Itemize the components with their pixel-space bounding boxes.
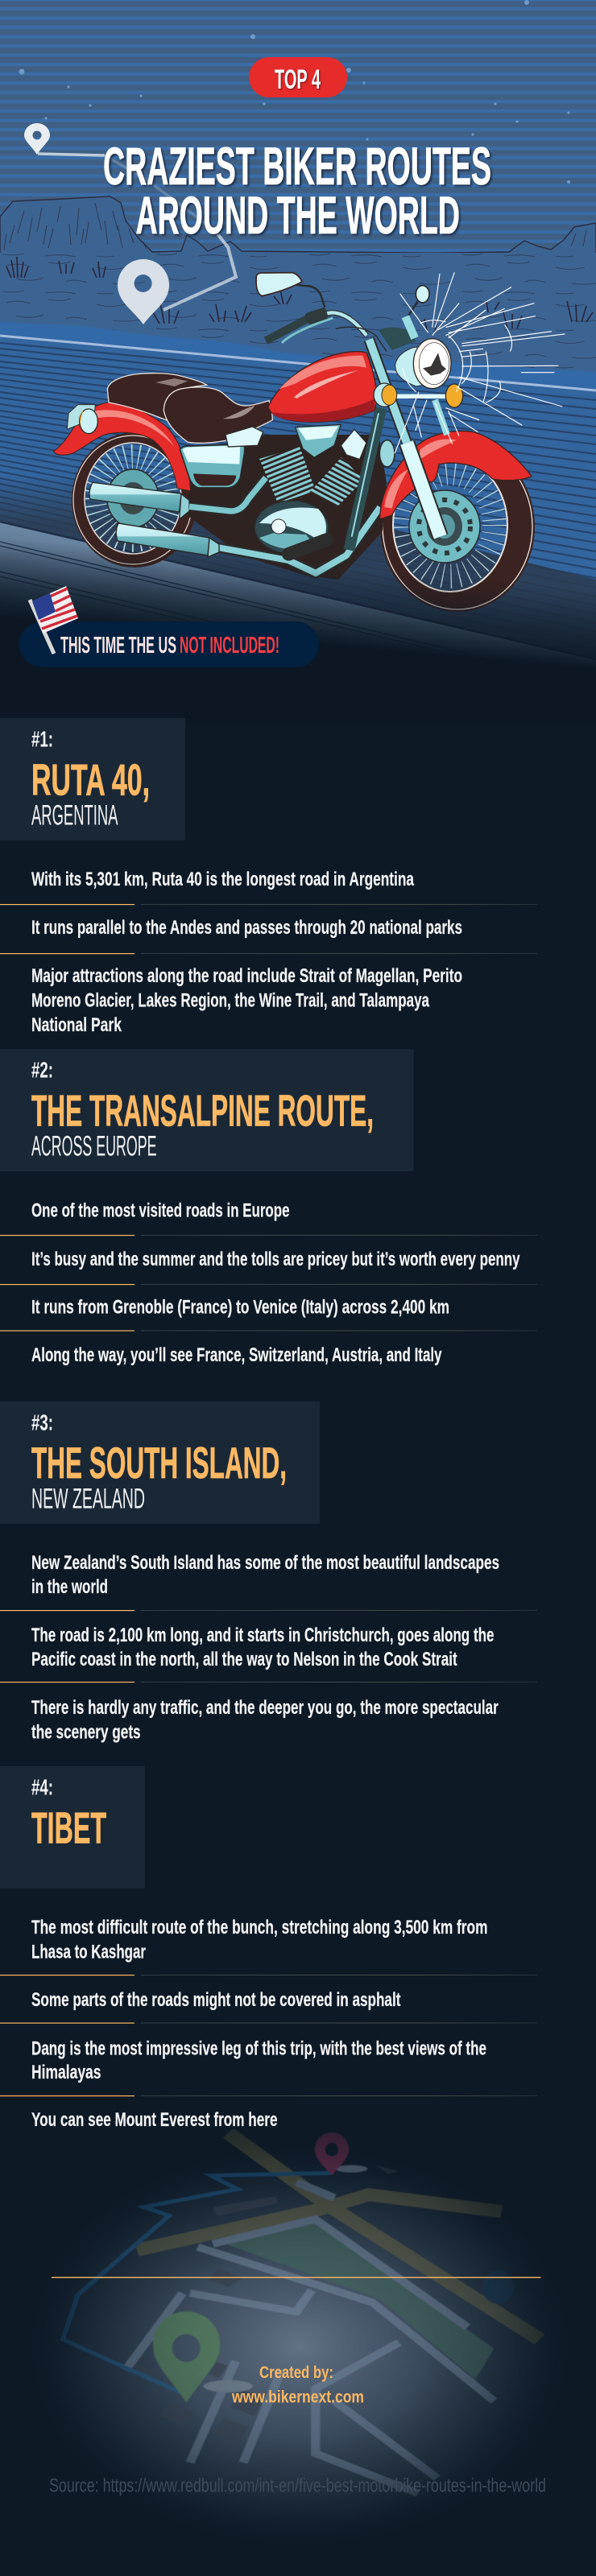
tank highlight bbox=[279, 356, 366, 389]
text: Tibet facts: Some parts of the roads might not be covered in asphalt bbox=[31, 1989, 400, 2011]
panel: Ruta 40 heading: RUTA 40, bbox=[31, 754, 150, 804]
taillight bbox=[67, 405, 97, 434]
fork upper left bbox=[369, 340, 407, 443]
pillion seat bbox=[107, 374, 207, 421]
footer divider line bbox=[52, 2277, 541, 2278]
brake lever bbox=[282, 318, 333, 343]
icon: faint blue pin bbox=[482, 2270, 514, 2304]
fork right bbox=[435, 400, 447, 435]
front wheel bbox=[380, 441, 535, 612]
crank cover bbox=[255, 501, 329, 554]
tank lower shade bbox=[271, 398, 375, 422]
oil tank cover bbox=[180, 444, 245, 488]
panel: South Island heading: NEW ZEALAND bbox=[31, 1484, 145, 1515]
right bar stub bbox=[405, 316, 415, 338]
upper exhaust pipe bbox=[189, 477, 266, 511]
top 4 badge bbox=[249, 57, 347, 97]
rider seat bbox=[163, 387, 272, 443]
text: South Island facts bbox=[0, 1552, 537, 1744]
text: Ruta 40 facts: With its 5,301 km, Ruta 40 is the longest road in Argentina bbox=[31, 869, 414, 890]
blue route bbox=[63, 2173, 331, 2393]
indicator bar bbox=[392, 390, 451, 402]
section 1: Ruta 40 bbox=[0, 718, 537, 1036]
panel: Tibet heading: TIBET bbox=[31, 1802, 106, 1852]
upper exhaust muffler bbox=[89, 482, 181, 512]
section 4: Tibet bbox=[0, 1766, 537, 2131]
striped night sky bbox=[0, 0, 596, 266]
engine block bbox=[187, 435, 387, 580]
headlight lens reflection bbox=[423, 353, 446, 376]
buildings bbox=[133, 2165, 399, 2443]
upper exhaust cone bbox=[180, 493, 189, 519]
route line from small pin bbox=[38, 154, 105, 155]
fender highlights bbox=[384, 439, 457, 509]
icon: green pin bbox=[153, 2311, 220, 2403]
road shoulder bbox=[0, 521, 596, 724]
handlebar grip bbox=[266, 318, 308, 341]
engine cooling fins bbox=[259, 447, 364, 506]
map details bbox=[63, 2132, 540, 2493]
text: Tibet facts: You can see Mount Everest from here bbox=[31, 2109, 277, 2131]
text: Ruta 40 facts bbox=[0, 869, 537, 1036]
left mirror stem bbox=[280, 283, 325, 308]
fuel tank bbox=[268, 352, 377, 422]
fork lower left bbox=[407, 443, 441, 537]
panel: South Island heading: THE SOUTH ISLAND, bbox=[31, 1438, 287, 1488]
rider seat sheen bbox=[223, 406, 255, 419]
motorcycle bbox=[54, 272, 565, 612]
credit: Created by: bbox=[259, 2363, 333, 2382]
panel: South Island heading bbox=[0, 1402, 320, 1524]
left indicator bbox=[374, 383, 397, 407]
text: Tibet facts: Lhasa to Kashgar bbox=[31, 1941, 146, 1963]
pin shadows bbox=[203, 2165, 367, 2392]
title bbox=[103, 136, 491, 245]
callout text: THIS TIME THE US bbox=[60, 633, 176, 658]
lower exhaust bbox=[116, 507, 380, 573]
shoulder line work bbox=[0, 522, 596, 659]
right mirror bbox=[416, 286, 429, 303]
white road line bbox=[0, 336, 596, 390]
headlight glass bbox=[419, 343, 449, 385]
credit bbox=[231, 2363, 364, 2407]
cylinder head covers bbox=[226, 424, 395, 467]
faint middle route bbox=[105, 155, 213, 229]
panel: Ruta 40 heading: ARGENTINA bbox=[31, 800, 118, 832]
park area bbox=[217, 2221, 495, 2380]
front fender bbox=[380, 431, 532, 519]
section 3: The South Island bbox=[0, 1402, 537, 1744]
panel: South Island heading: #3: bbox=[31, 1410, 53, 1435]
rear fender bbox=[54, 402, 191, 491]
icon: US flag bbox=[30, 586, 78, 654]
panel: Ruta 40 heading bbox=[0, 718, 185, 840]
shoulder lines bbox=[0, 542, 596, 717]
panel: Transalpine heading: #2: bbox=[31, 1058, 53, 1083]
headlight sunburst bbox=[395, 272, 565, 453]
road bbox=[0, 336, 596, 660]
headlight housing bbox=[395, 346, 433, 386]
switch housing bbox=[304, 307, 329, 325]
stars bbox=[19, 0, 570, 184]
text: Transalpine facts: One of the most visited roads in Europe bbox=[31, 1199, 290, 1222]
frame tube bbox=[349, 408, 381, 550]
brake cable bbox=[336, 327, 387, 352]
mesa hatching bbox=[4, 203, 586, 250]
map glow bbox=[0, 2093, 596, 2576]
text: Ruta 40 facts: Moreno Glacier, Lakes Region, the Wine Trail, and Talampaya bbox=[31, 989, 429, 1011]
road darkening bbox=[0, 451, 596, 660]
text: South Island facts: in the world bbox=[31, 1576, 108, 1598]
grass tufts bbox=[6, 257, 593, 332]
panel: Ruta 40 heading: #1: bbox=[31, 727, 53, 752]
icon: large location pin bbox=[118, 259, 169, 324]
frame highlight bbox=[352, 413, 379, 537]
fork crown dark bbox=[379, 328, 416, 350]
rear wheel bbox=[72, 432, 197, 568]
foot peg bbox=[288, 540, 326, 554]
icon: small location pin bbox=[24, 123, 50, 155]
yellow roads bbox=[137, 2133, 540, 2339]
credit: www.bikernext.com bbox=[231, 2388, 364, 2407]
desert mesas and horizon bbox=[0, 196, 596, 254]
text: Tibet facts bbox=[0, 1917, 537, 2131]
seat sheen bbox=[155, 378, 188, 386]
tank streak bbox=[294, 370, 358, 398]
desert ground bbox=[0, 253, 596, 391]
top 4 badge: TOP 4 bbox=[275, 64, 321, 95]
road stripes bbox=[0, 343, 596, 650]
headlight bbox=[413, 339, 451, 389]
text: South Island facts: the scenery gets bbox=[31, 1722, 141, 1744]
text: Ruta 40 facts: National Park bbox=[31, 1014, 122, 1036]
fender highlight bbox=[94, 410, 175, 447]
text: Transalpine facts: Along the way, you’ll see France, Switzerland, Austria, and Italy bbox=[31, 1344, 442, 1366]
map background illustration bbox=[60, 2128, 544, 2520]
text: Transalpine facts: It runs from Grenoble (France) to Venice (Italy) across 2,400 km bbox=[31, 1296, 449, 1319]
front body parts bbox=[226, 272, 565, 554]
right indicator bbox=[445, 384, 463, 407]
callout: this time the US not included: NOT INCLUDED! bbox=[180, 633, 279, 658]
route line to large pin bbox=[163, 232, 236, 310]
panel: Transalpine heading bbox=[0, 1049, 414, 1171]
section 2: The Transalpine Route bbox=[0, 1049, 537, 1366]
upper exhaust pipe chrome bbox=[189, 477, 266, 511]
icon: red pin bbox=[315, 2132, 349, 2176]
panel: Transalpine heading: ACROSS EUROPE bbox=[31, 1131, 156, 1162]
text: Tibet facts: Himalayas bbox=[31, 2062, 101, 2083]
fork upper left chrome bbox=[369, 340, 407, 443]
handlebar bbox=[308, 312, 366, 336]
handlebar chrome bbox=[308, 312, 366, 336]
road edge contour bbox=[0, 322, 596, 391]
callout: this time the US not included bbox=[19, 586, 319, 667]
panel: Tibet heading: #4: bbox=[31, 1775, 53, 1800]
callout pill bbox=[19, 621, 319, 667]
grey streets bbox=[126, 2182, 495, 2493]
text: Transalpine facts bbox=[0, 1199, 537, 1366]
right mirror stem bbox=[407, 298, 420, 318]
fork lower left chrome bbox=[407, 443, 441, 537]
left mirror bbox=[256, 273, 302, 296]
rear body parts bbox=[54, 374, 272, 519]
panel: Tibet heading bbox=[0, 1766, 145, 1889]
bottom dark fade bbox=[0, 515, 596, 724]
hero illustration bbox=[0, 0, 596, 724]
